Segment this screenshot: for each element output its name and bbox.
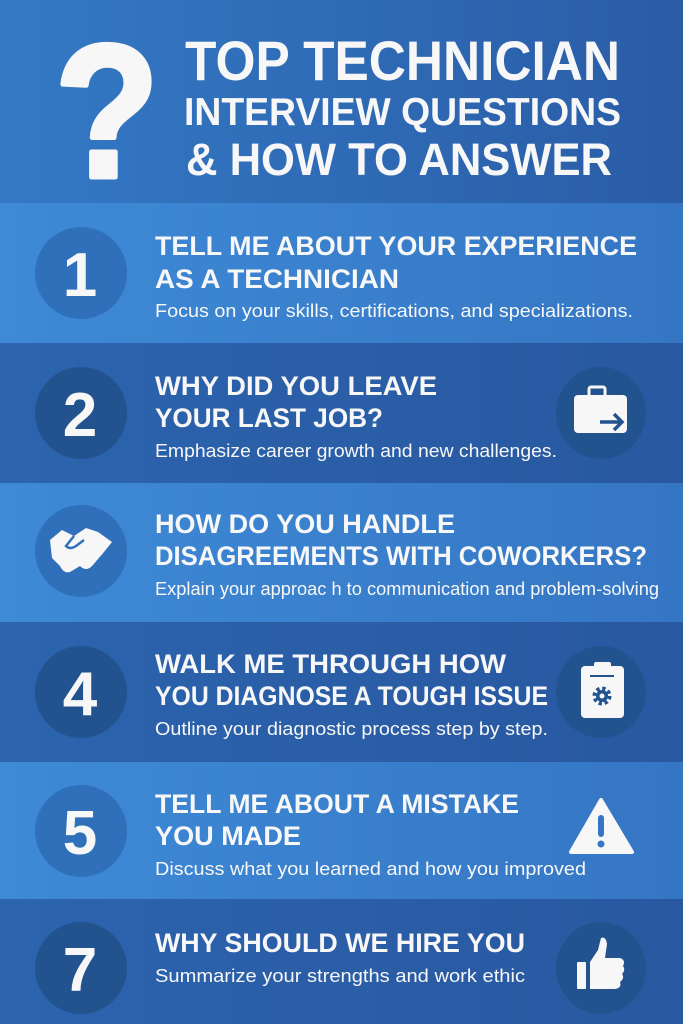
icon: briefcase exit — [556, 367, 646, 459]
text 7: Summarize your strengths and work ethic — [155, 966, 525, 986]
text 3: Explain your approac h to communication and problem-solving — [155, 579, 659, 599]
text 2: Emphasize career growth and new challenges. — [155, 441, 557, 461]
number circle 4 — [35, 646, 127, 738]
panel: question 2 — [0, 343, 683, 483]
icon: thumbs up — [556, 922, 646, 1014]
number circle 1 — [35, 227, 127, 319]
heading 1 — [155, 231, 637, 294]
panel: question 5 — [0, 762, 683, 899]
heading 5 — [155, 789, 519, 851]
title: INTERVIEW QUESTIONS — [184, 91, 621, 134]
title: TOP TECHNICIAN — [185, 29, 620, 92]
heading 5: YOU MADE — [155, 821, 301, 851]
text 4: Outline your diagnostic process step by step. — [155, 719, 548, 739]
number circle 2: 2 — [63, 381, 97, 450]
heading 4: WALK ME THROUGH HOW — [155, 649, 507, 679]
panel: question 7 — [0, 899, 683, 1024]
header — [0, 0, 683, 218]
heading 1: AS A TECHNICIAN — [155, 264, 399, 294]
heading 2: WHY DID YOU LEAVE — [155, 371, 437, 401]
number circle 2 — [35, 367, 127, 459]
heading 3 — [155, 509, 647, 571]
number circle 5 — [35, 785, 127, 877]
heading 2: YOUR LAST JOB? — [155, 403, 383, 433]
text 5: Discuss what you learned and how you improved — [155, 859, 586, 879]
icon: warning triangle — [571, 800, 632, 852]
icon: handshake — [35, 505, 127, 597]
title — [184, 29, 621, 185]
number circle 7 — [35, 922, 127, 1014]
heading 1: TELL ME ABOUT YOUR EXPERIENCE — [155, 231, 637, 261]
heading 4 — [155, 649, 548, 711]
heading 7: WHY SHOULD WE HIRE YOU — [155, 928, 525, 958]
panel: question 3 — [0, 483, 683, 622]
heading 5: TELL ME ABOUT A MISTAKE — [155, 789, 519, 819]
number circle 7: 7 — [63, 936, 97, 1005]
text 1: Focus on your skills, certifications, and specializations. — [155, 301, 633, 321]
number circle 5: 5 — [63, 799, 97, 868]
heading 3: DISAGREEMENTS WITH COWORKERS? — [155, 541, 647, 571]
number circle 1: 1 — [63, 241, 97, 310]
heading 4: YOU DIAGNOSE A TOUGH ISSUE — [155, 681, 548, 711]
panel: question 4 — [0, 622, 683, 762]
panel: question 1 — [0, 203, 683, 343]
heading 3: HOW DO YOU HANDLE — [155, 509, 455, 539]
number circle 4: 4 — [63, 660, 98, 729]
icon: question mark: ? — [55, 6, 159, 218]
title: & HOW TO ANSWER — [186, 134, 612, 185]
icon: clipboard gear — [556, 646, 646, 738]
heading 2 — [155, 371, 437, 433]
